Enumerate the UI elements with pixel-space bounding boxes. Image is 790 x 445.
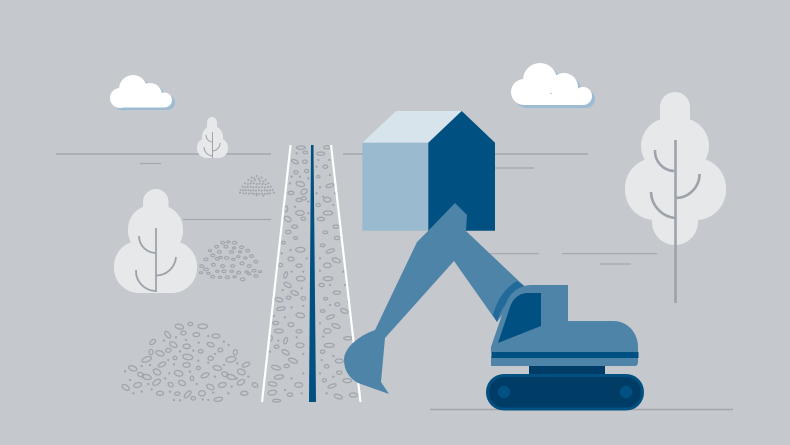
excavator: undercarriage bbox=[529, 366, 605, 375]
excavator: wheels bbox=[498, 386, 510, 398]
cloud shadow bbox=[514, 66, 595, 108]
tree: medium bbox=[114, 189, 197, 293]
cloud shadow bbox=[113, 78, 175, 110]
excavator: cab body bbox=[491, 285, 638, 366]
excavator: arm and bucket bbox=[344, 203, 523, 394]
cloud: left bbox=[110, 75, 175, 110]
road gravel: lower bbox=[268, 230, 357, 402]
road edge: left bbox=[262, 145, 291, 402]
road with gravel bbox=[262, 145, 360, 402]
house: roof bbox=[362, 111, 462, 143]
house: left wall bbox=[362, 143, 428, 231]
gravel pile: large bbox=[121, 322, 259, 402]
house: right wall bbox=[428, 111, 495, 231]
road centre line bbox=[309, 145, 316, 402]
excavator: cab window bbox=[498, 293, 541, 343]
tree: large bbox=[625, 92, 726, 303]
excavator: body stripe bbox=[492, 352, 638, 358]
gravel pile: small bbox=[239, 175, 275, 197]
cloud body bbox=[511, 63, 592, 105]
road gravel: small stones bbox=[269, 249, 349, 394]
excavator: boom joint ring bbox=[493, 281, 526, 322]
excavator: track bbox=[486, 374, 644, 410]
cloud: right bbox=[511, 63, 595, 108]
road gravel: upper small stones bbox=[289, 152, 336, 214]
ground lines bbox=[56, 154, 733, 410]
house bbox=[362, 111, 495, 231]
excavator bbox=[344, 203, 644, 410]
road edge: right bbox=[331, 145, 360, 402]
road gravel: upper bbox=[283, 146, 339, 228]
tree: small bbox=[197, 117, 228, 158]
cloud body bbox=[110, 75, 172, 108]
gravel pile: medium bbox=[199, 241, 262, 281]
